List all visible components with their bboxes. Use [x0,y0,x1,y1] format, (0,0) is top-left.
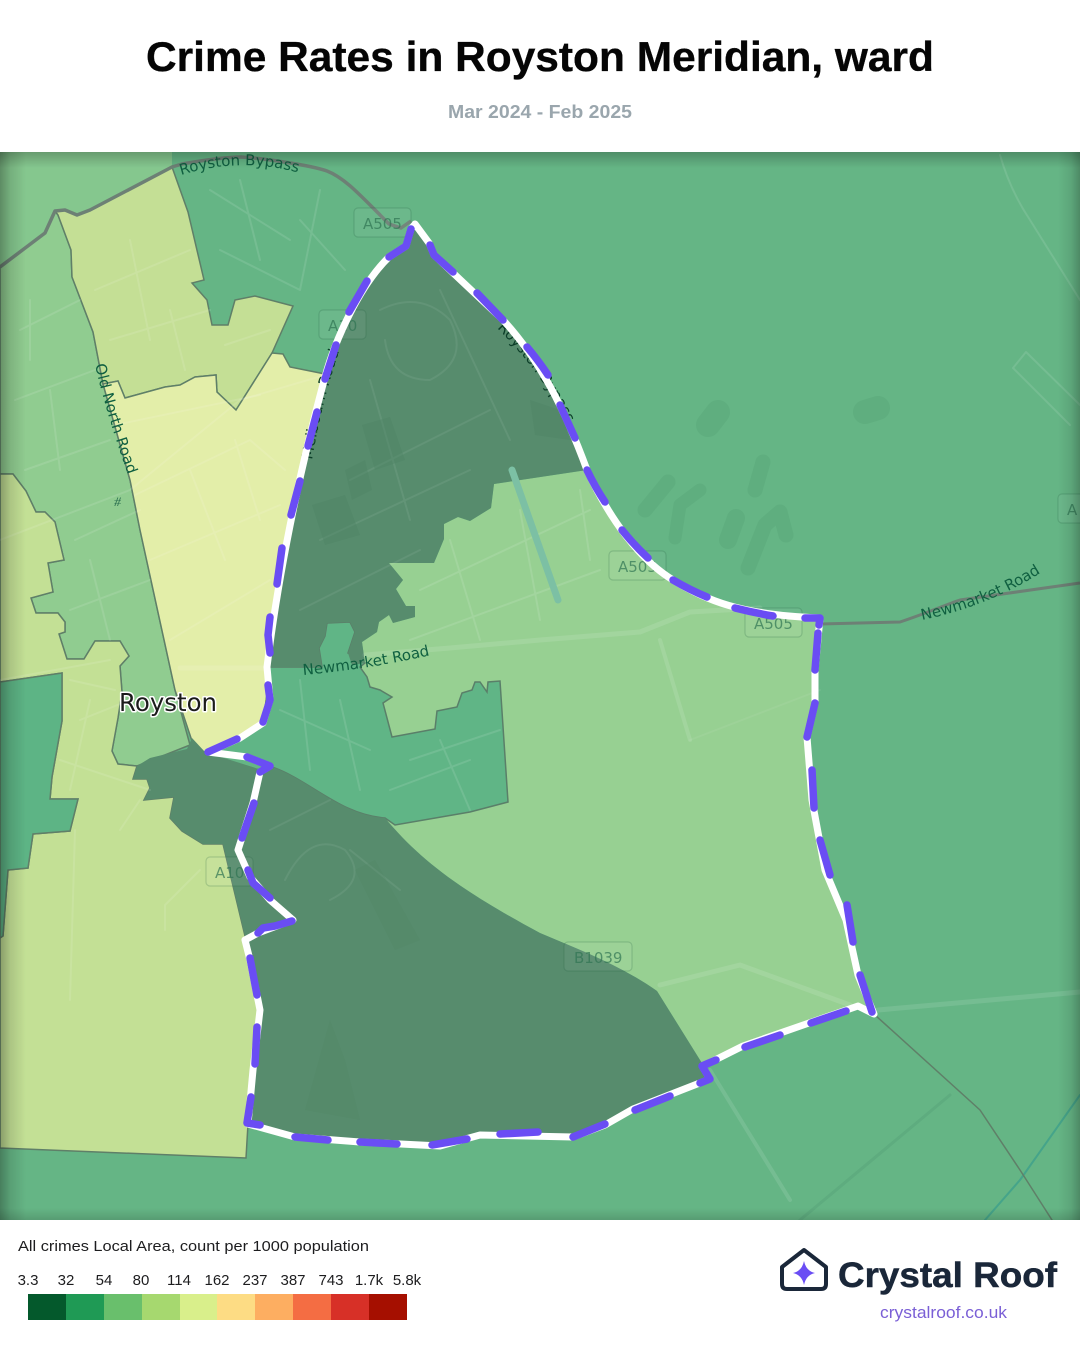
road shields: A505 [618,558,657,576]
road labels: Royston Bypass [498,324,574,419]
area: far-west teal block [0,673,78,938]
area: pale north Royston [55,167,293,410]
road shields: B1039 [574,949,622,967]
legend scale values: 54 [96,1272,112,1289]
area: top-left corner and western neighbourhood [0,152,172,267]
legend scale values: 80 [133,1272,149,1289]
legend scale values: 3.3 [18,1272,38,1289]
legend scale values: 114 [167,1272,191,1289]
legend colour bar [28,1294,407,1320]
legend scale values: 237 [242,1272,268,1289]
icon: house with star [782,1250,826,1289]
legend title: All crimes Local Area, count per 1000 population [18,1238,369,1255]
map background: surrounding low-crime area [0,152,1080,1220]
road labels: Newmarket Road [921,564,1040,620]
road labels: Newmarket Road [304,644,428,675]
ward boundary: purple dashes [208,229,872,1145]
ward area: dark southern high-crime zone [238,767,710,1146]
subtitle: date range: Mar 2024 - Feb 2025 [448,101,632,122]
road shields: A505 [363,215,402,233]
ward area: eastern light green [360,470,874,1068]
logo: Crystal Roof [782,1250,1057,1322]
legend scale values: 32 [58,1272,74,1289]
darker land-use patches [323,420,403,539]
legend [18,1238,422,1320]
streets and roads [0,155,1080,1200]
road: Newmarket Road grey line [820,583,1080,624]
road labels: Old North Road [96,364,138,474]
road shields [206,208,1080,971]
water and boundary lines [800,1015,1080,1220]
ward boundary: white base line [208,224,874,1146]
ward area: dark northern high-crime zone [267,224,587,667]
area: dark south-west wedge outside ward [133,738,293,936]
road shields: A10 [328,317,357,335]
ward area: mid green housing [264,622,509,826]
station icon: ⧣ [114,493,121,508]
legend scale values [18,1272,422,1289]
road labels [96,154,1040,675]
title: Crime Rates in Royston Meridian, ward [146,33,934,80]
area: south-west pale green [0,474,260,1158]
place label: Royston: Royston [119,688,217,717]
legend scale values: 5.8k [393,1272,422,1289]
railway corridor [512,470,558,600]
road shields: A505 [754,615,793,633]
road: Royston Bypass grey line [0,157,411,267]
map panel [0,152,1080,1220]
legend scale values: 743 [318,1272,344,1289]
golf course shapes [645,408,878,568]
road labels: Royston Bypass [180,154,299,174]
map edge vignette [0,152,1080,1220]
legend scale values: 1.7k [355,1272,384,1289]
area: west of Old North Road [0,211,190,766]
road shields: A10 [215,864,244,882]
logo wordmark: Crystal Roof [838,1256,1057,1295]
road labels: Melbourn Road [302,348,339,458]
legend scale values: 387 [280,1272,306,1289]
area: palest central Royston [103,353,325,752]
website: crystalroof.co.uk [880,1304,1008,1322]
legend scale values: 162 [204,1272,230,1289]
road shields: A [1067,501,1078,519]
